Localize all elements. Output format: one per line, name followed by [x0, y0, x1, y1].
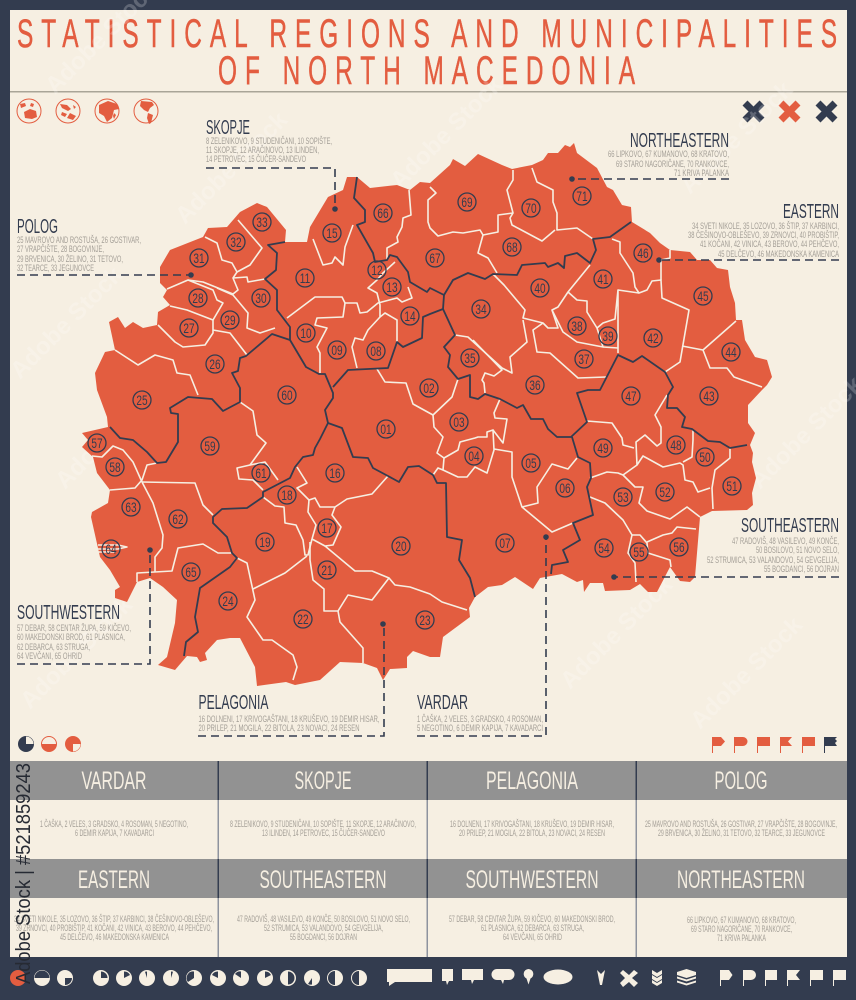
number 25	[133, 391, 151, 409]
callout: Pelagonia: PELAGONIA	[198, 692, 269, 714]
cell: Pelagonia: 20 PRILEP, 21 MOGILA, 22 BITOLA, 23 NOVACI, 24 RESEN	[459, 828, 605, 839]
number 42: 42	[647, 330, 659, 346]
number 37: 37	[578, 351, 590, 367]
number 11	[296, 269, 314, 287]
number 49	[594, 439, 612, 457]
number 08	[367, 342, 385, 360]
number 54: 54	[598, 540, 610, 556]
number 03: 03	[453, 414, 465, 430]
number 40: 40	[534, 280, 546, 296]
callout: Skopje: 14 PETROVEC, 15 ČUČER-SANDEVO	[206, 154, 306, 165]
number 34: 34	[475, 301, 487, 317]
cell: Eastern	[14, 866, 214, 943]
number 44	[722, 343, 740, 361]
number 04: 04	[468, 448, 480, 464]
number 54	[595, 539, 613, 557]
number 71: 71	[576, 188, 588, 204]
number 59	[201, 437, 219, 455]
number 57	[88, 434, 106, 452]
cell: Vardar: 1 ČAŠKA, 2 VELES, 3 GRADSKO, 4 ROSOMAN, 5 NEGOTINO,	[40, 819, 188, 830]
country silhouette	[82, 143, 772, 686]
callout: Southwestern: 64 VEVČANI, 65 OHRID	[17, 651, 82, 662]
number 24	[219, 592, 237, 610]
table header bands	[10, 761, 847, 800]
icons: flags	[712, 737, 837, 753]
number 52: 52	[659, 484, 671, 500]
number 15: 15	[326, 225, 338, 241]
callout: Southeastern	[611, 515, 839, 580]
faint watermark: Adobe Stock	[5, 261, 128, 384]
cell: Vardar: VARDAR	[82, 767, 146, 795]
callout: Northeastern: NORTHEASTERN	[630, 130, 729, 152]
callout: Polog: 29 BRVENICA, 30 ŽELINO, 31 TETOVO,	[17, 254, 123, 265]
cell: Southwestern: 57 DEBAR, 58 CENTAR ŽUPA, 59 KIČEVO, 60 MAKEDONSKI BROD,	[449, 914, 615, 925]
number 40	[531, 279, 549, 297]
title	[17, 12, 845, 93]
number 55: 55	[633, 544, 645, 560]
cell: Northeastern: 71 KRIVA PALANKA	[717, 933, 766, 944]
number 53: 53	[617, 489, 629, 505]
number 11: 11	[300, 270, 310, 286]
number 18	[278, 486, 296, 504]
number 22	[294, 610, 312, 628]
cell: Pelagonia: 16 DOLNENI, 17 KRIVOGAŠTANI, 18 KRUŠEVO, 19 DEMIR HISAR,	[450, 819, 614, 830]
number 41	[594, 270, 612, 288]
number 20: 20	[395, 538, 407, 554]
number 31	[190, 249, 208, 267]
callout: Northeastern	[569, 130, 729, 182]
number 16: 16	[329, 465, 341, 481]
number 35	[461, 349, 479, 367]
number 26	[206, 355, 224, 373]
number 16	[326, 464, 344, 482]
number 49: 49	[597, 440, 609, 456]
number 57: 57	[91, 435, 103, 451]
cell: Pelagonia	[450, 767, 614, 839]
number 70	[522, 199, 540, 217]
number 52	[656, 483, 674, 501]
number 64: 64	[105, 541, 117, 557]
number 09	[328, 341, 346, 359]
number 10: 10	[300, 325, 312, 341]
cell: Southwestern	[449, 866, 615, 943]
number 45: 45	[697, 288, 709, 304]
cell: Skopje	[230, 767, 416, 839]
number 50: 50	[699, 449, 711, 465]
callout: Northeastern: 71 KRIVA PALANKA	[674, 168, 729, 179]
number 68	[503, 238, 521, 256]
number 23	[416, 611, 434, 629]
callout: Pelagonia: 20 PRILEP, 21 MOGILA, 22 BITOLA, 23 NOVACI, 24 RESEN	[198, 723, 360, 734]
number 58	[106, 458, 124, 476]
number 17: 17	[321, 520, 333, 536]
number 38	[568, 317, 586, 335]
number 27	[180, 319, 198, 337]
vertical stock id: Adobe Stock | #521859243	[13, 763, 35, 984]
number 12: 12	[371, 262, 383, 278]
number 41: 41	[597, 271, 609, 287]
number 15	[323, 224, 341, 242]
callout: Skopje: 8 ZELENIKOVO, 9 STUDENIČANI, 10 SOPIŠTE,	[206, 136, 332, 147]
callout: Southwestern: 60 MAKEDONSKI BROD, 61 PLASNICA,	[17, 632, 125, 643]
number 60: 60	[281, 387, 293, 403]
faint watermark: Adobe Stock	[685, 611, 808, 734]
cell: Northeastern	[677, 866, 805, 944]
cell: Eastern: 34 SVETI NIKOLE, 35 LOZOVO, 36 ŠTIP, 37 KARBINCI, 38 ČEŠINOVO-OBLEŠEVO,	[14, 914, 214, 925]
number 63	[122, 498, 140, 516]
callout: Pelagonia	[198, 621, 386, 736]
number 39: 39	[602, 328, 614, 344]
number 27: 27	[183, 320, 195, 336]
number 14: 14	[404, 308, 416, 324]
callout: Polog: 27 VRAPČIŠTE, 28 BOGOVINJE,	[17, 244, 104, 255]
number 10	[297, 324, 315, 342]
cell: Pelagonia: PELAGONIA	[486, 767, 578, 795]
number 22: 22	[297, 611, 309, 627]
number 69: 69	[461, 194, 473, 210]
callout: Polog	[17, 216, 194, 278]
number 30: 30	[255, 290, 267, 306]
number 30	[252, 289, 270, 307]
callout: Skopje	[206, 117, 338, 212]
number 05	[522, 454, 540, 472]
table of regions	[10, 761, 847, 957]
number 13	[383, 278, 401, 296]
number 29	[221, 311, 239, 329]
number 62	[169, 510, 187, 528]
number 28	[189, 289, 207, 307]
number 39	[599, 327, 617, 345]
cell: Southeastern: SOUTHEASTERN	[260, 866, 386, 894]
icons: crosses	[745, 103, 835, 120]
cell: Polog: POLOG	[714, 767, 768, 795]
number 47	[622, 387, 640, 405]
icons: speech bubbles	[387, 969, 572, 986]
municipality numbers	[88, 187, 741, 629]
cell: Eastern: 45 DELČEVO, 46 MAKEDONSKA KAMENICA	[60, 932, 169, 943]
faint watermark: Adobe Stock	[555, 571, 678, 694]
number 01: 01	[380, 421, 392, 437]
number 24: 24	[222, 593, 234, 609]
number 48	[667, 436, 685, 454]
cell: Eastern: 39 ZRNOVCI, 40 PROBIŠTIP, 41 KOČANI, 42 VINICA, 43 BEROVO, 44 PEHČEVO,	[16, 923, 212, 934]
number 09: 09	[331, 342, 343, 358]
number 33	[253, 213, 271, 231]
number 06	[556, 479, 574, 497]
number 01	[377, 420, 395, 438]
number 02	[420, 379, 438, 397]
cell: Skopje: 8 ZELENIKOVO, 9 STUDENIČANI, 10 SOPIŠTE, 11 SKOPJE, 12 ARAČINOVO,	[230, 819, 416, 830]
callout: Skopje: SKOPJE	[206, 117, 250, 139]
cell: Skopje: 13 ILINDEN, 14 PETROVEC, 15 ČUČER-SANDEVO	[262, 828, 385, 839]
number 25: 25	[136, 392, 148, 408]
number 32: 32	[230, 234, 242, 250]
column dividers	[218, 761, 637, 957]
callout: Southwestern: 62 DEBARCA, 63 STRUGA,	[17, 642, 90, 653]
number 21: 21	[321, 562, 333, 578]
cell: Southwestern: 64 VEVČANI, 65 OHRID	[503, 932, 562, 943]
callout: Vardar: 5 NEGOTINO, 6 DEMIR KAPIJA, 7 KAVADARCI	[417, 723, 543, 734]
cell: Vardar	[40, 767, 188, 839]
callout: Southwestern	[17, 547, 153, 664]
number 68: 68	[506, 239, 518, 255]
number 12	[368, 261, 386, 279]
number 66	[374, 204, 392, 222]
number 43	[700, 387, 718, 405]
faint watermark: Adobe Stock	[50, 371, 173, 494]
number 36: 36	[529, 377, 541, 393]
number 48: 48	[670, 437, 682, 453]
number 19: 19	[259, 534, 271, 550]
callout: Polog: POLOG	[17, 216, 58, 238]
callout: Northeastern: 69 STARO NAGORIČANE, 70 RANKOVCE,	[616, 159, 729, 170]
number 07: 07	[499, 535, 511, 551]
cell: Polog	[645, 767, 837, 839]
number 17	[318, 519, 336, 537]
number 50	[696, 448, 714, 466]
faint watermark: Adobe Stock	[15, 591, 138, 714]
municipal boundaries	[92, 168, 762, 680]
number 67	[426, 249, 444, 267]
number 55	[630, 543, 648, 561]
faint watermark	[5, 0, 856, 734]
number 19	[256, 533, 274, 551]
cell: Southwestern: SOUTHWESTERN	[466, 866, 598, 894]
number 45	[694, 287, 712, 305]
number 42	[644, 329, 662, 347]
callout: Pelagonia: 16 DOLNENI, 17 KRIVOGAŠTANI, 18 KRUŠEVO, 19 DEMIR HISAR,	[198, 714, 380, 725]
map of municipalities	[82, 143, 772, 686]
icons: small pies	[18, 736, 81, 752]
callout: Vardar	[417, 534, 549, 736]
callout: Polog: 32 TEARCE, 33 JEGUNOVCE	[17, 263, 94, 274]
cell: Southwestern: 61 PLASNICA, 62 DEBARCA, 63 STRUGA,	[481, 923, 584, 934]
number 56	[670, 538, 688, 556]
number 29: 29	[224, 312, 236, 328]
number 34	[472, 300, 490, 318]
callout: Southwestern: 57 DEBAR, 58 CENTAR ŽUPA, 59 KIČEVO,	[17, 623, 131, 634]
number 20	[392, 537, 410, 555]
number 33: 33	[256, 214, 268, 230]
statistical region boundaries	[110, 177, 747, 656]
number 58: 58	[109, 459, 121, 475]
number 47: 47	[625, 388, 637, 404]
icons: bottom pies	[10, 970, 366, 986]
number 05: 05	[525, 455, 537, 471]
callout: Vardar: VARDAR	[417, 692, 468, 714]
number 07	[496, 534, 514, 552]
number 69	[458, 193, 476, 211]
number 59: 59	[204, 438, 216, 454]
number 43: 43	[703, 388, 715, 404]
number 08: 08	[370, 343, 382, 359]
callout: Skopje: 11 SKOPJE, 12 ARAČINOVO, 13 ILINDEN,	[206, 145, 319, 156]
callout: Southwestern: SOUTHWESTERN	[17, 602, 120, 624]
callout: Northeastern: 66 LIPKOVO, 67 KUMANOVO, 68 KRATOVO,	[608, 149, 729, 160]
number 46: 46	[637, 245, 649, 261]
number 60	[278, 386, 296, 404]
number 70: 70	[525, 200, 537, 216]
number 21	[318, 561, 336, 579]
number 38: 38	[571, 318, 583, 334]
number 61	[252, 464, 270, 482]
number 56: 56	[673, 539, 685, 555]
cell: Southeastern: 47 RADOVIŠ, 48 VASILEVO, 49 KONČE, 50 BOSILOVO, 51 NOVO SELO,	[237, 914, 410, 925]
callout: Eastern	[656, 201, 839, 263]
number 02: 02	[423, 380, 435, 396]
cell: Southeastern	[237, 866, 410, 943]
icons: bottom flags	[720, 970, 846, 986]
number 62: 62	[172, 511, 184, 527]
number 36	[526, 376, 544, 394]
number 35: 35	[464, 350, 476, 366]
cell: Southeastern: 55 BOGDANCI, 56 DOJRAN	[290, 932, 357, 943]
number 44: 44	[725, 344, 737, 360]
icons: marks and chevrons	[597, 969, 696, 987]
number 66: 66	[377, 205, 389, 221]
number 63: 63	[125, 499, 137, 515]
number 13: 13	[386, 279, 398, 295]
faint watermark: Adobe Stock	[675, 76, 798, 199]
number 64	[102, 540, 120, 558]
cell: Southeastern: 52 STRUMICA, 53 VALANDOVO, 54 GEVGELIJA,	[264, 923, 383, 934]
cell: Skopje: SKOPJE	[294, 767, 352, 795]
number 32	[227, 233, 245, 251]
icons: globes	[17, 99, 158, 124]
cell: Vardar: 6 DEMIR KAPIJA, 7 KAVADARCI	[75, 828, 154, 839]
number 71	[573, 187, 591, 205]
number 51	[723, 477, 741, 495]
number 18: 18	[281, 487, 293, 503]
number 37	[575, 350, 593, 368]
number 53	[614, 488, 632, 506]
callout: Polog: 25 MAVROVO AND ROSTUŠA, 26 GOSTIVAR,	[17, 235, 141, 246]
number 51: 51	[726, 478, 738, 494]
number 67: 67	[429, 250, 441, 266]
number 23: 23	[419, 612, 431, 628]
number 31: 31	[193, 250, 205, 266]
cell: Eastern: EASTERN	[78, 866, 150, 894]
number 28: 28	[192, 290, 204, 306]
faint watermark: Adobe Stock	[170, 106, 293, 229]
number 14	[401, 307, 419, 325]
number 06: 06	[559, 480, 571, 496]
number 26: 26	[209, 356, 221, 372]
callout: Vardar: 1 ČAŠKA, 2 VELES, 3 GRADSKO, 4 ROSOMAN,	[417, 714, 543, 725]
faint watermark: Adobe Stock	[385, 71, 508, 194]
number 65: 65	[185, 564, 197, 580]
number 03	[450, 413, 468, 431]
number 61: 61	[255, 465, 267, 481]
number 04	[465, 447, 483, 465]
number 65	[182, 563, 200, 581]
number 46	[634, 244, 652, 262]
